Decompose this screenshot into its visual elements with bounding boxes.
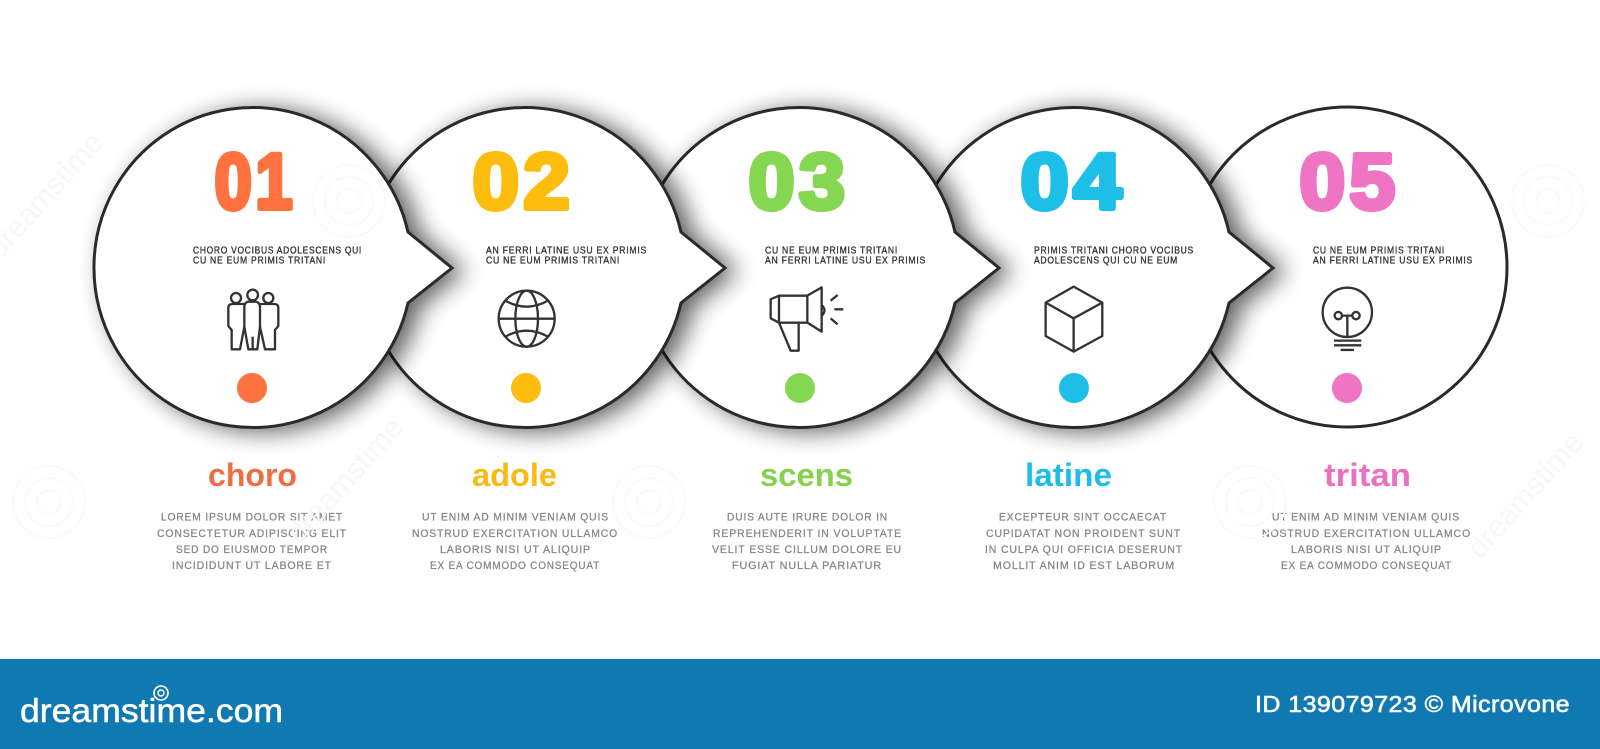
column: latine: [985, 457, 1183, 572]
footer logo: dreamstime.com: [20, 692, 283, 729]
icon: megaphone: [771, 287, 843, 351]
panel: step 05: [1187, 107, 1507, 427]
step 02 text: [486, 244, 647, 266]
number 04: 04: [1020, 137, 1126, 226]
column: latine: EXCEPTEUR SINT OCCAECAT: [999, 512, 1167, 524]
footer bar: [0, 659, 1600, 749]
panel: step 03: [639, 107, 999, 427]
icon: globe: [499, 291, 555, 347]
column: choro: choro: [208, 457, 297, 493]
step 05 text: AN FERRI LATINE USU EX PRIMIS: [1313, 254, 1473, 266]
step 03 text: CU NE EUM PRIMIS TRITANI: [765, 244, 898, 256]
step 01 text: CHORO VOCIBUS ADOLESCENS QUI: [193, 244, 362, 256]
column: adole: NOSTRUD EXERCITATION ULLAMCO: [412, 528, 618, 540]
column: choro: [157, 457, 347, 572]
panel: step 01: [94, 107, 452, 427]
column: adole: [412, 457, 618, 572]
step 01 text: [193, 244, 362, 266]
panel: step 02: [365, 107, 725, 427]
step dot 03: [785, 373, 815, 403]
icon: light bulb: [1323, 288, 1372, 350]
step 04 text: PRIMIS TRITANI CHORO VOCIBUS: [1034, 244, 1194, 256]
column: tritan: tritan: [1324, 457, 1411, 493]
step 02 text: AN FERRI LATINE USU EX PRIMIS: [486, 244, 647, 256]
icon: people: [228, 290, 278, 349]
column: adole: LABORIS NISI UT ALIQUIP: [440, 544, 591, 556]
icon: cube: [1046, 287, 1102, 352]
watermark spirals: [13, 165, 1584, 538]
step 03 text: AN FERRI LATINE USU EX PRIMIS: [765, 254, 926, 266]
column: scens: REPREHENDERIT IN VOLUPTATE: [713, 528, 902, 540]
column: choro: LOREM IPSUM DOLOR SIT AMET: [161, 512, 343, 524]
column: scens: FUGIAT NULLA PARIATUR: [732, 560, 882, 572]
step 03 text: [765, 244, 926, 266]
column: scens: scens: [760, 457, 853, 493]
column: tritan: NOSTRUD EXERCITATION ULLAMCO: [1262, 528, 1471, 540]
step dot 04: [1059, 373, 1089, 403]
column: latine: CUPIDATAT NON PROIDENT SUNT: [986, 528, 1181, 540]
column: choro: CONSECTETUR ADIPISCING ELIT: [157, 528, 347, 540]
panel: step 04: [913, 107, 1273, 427]
column: adole: UT ENIM AD MINIM VENIAM QUIS: [422, 512, 609, 524]
watermark wordmarks: dreamstime: [1461, 426, 1590, 565]
number 05: 05: [1300, 138, 1399, 226]
column: adole: EX EA COMMODO CONSEQUAT: [430, 560, 600, 572]
column: scens: [712, 457, 902, 572]
step 05 text: CU NE EUM PRIMIS TRITANI: [1313, 244, 1445, 256]
column: choro: INCIDIDUNT UT LABORE ET: [172, 560, 332, 572]
footer credit: ID 139079723 © Microvone: [1255, 691, 1570, 717]
column: scens: DUIS AUTE IRURE DOLOR IN: [727, 512, 888, 524]
column: tritan: [1262, 457, 1471, 572]
column: latine: IN CULPA QUI OFFICIA DESERUNT: [985, 544, 1183, 556]
column: adole: adole: [472, 457, 557, 493]
column: tritan: LABORIS NISI UT ALIQUIP: [1291, 544, 1442, 556]
step 04 text: [1034, 244, 1194, 266]
step dot 02: [511, 373, 541, 403]
column: scens: VELIT ESSE CILLUM DOLORE EU: [712, 544, 902, 556]
number 02: 02: [472, 138, 574, 226]
step dot 01: [237, 373, 267, 403]
watermark wordmarks: dreamstime: [281, 411, 410, 550]
column: tritan: EX EA COMMODO CONSEQUAT: [1281, 560, 1452, 572]
watermark wordmarks: [0, 126, 1590, 565]
number 03: 03: [748, 138, 849, 226]
step 01 text: CU NE EUM PRIMIS TRITANI: [193, 254, 326, 266]
step dot 05: [1332, 373, 1362, 403]
number 01: 01: [214, 137, 296, 226]
step 02 text: CU NE EUM PRIMIS TRITANI: [486, 254, 620, 266]
step 04 text: ADOLESCENS QUI CU NE EUM: [1034, 254, 1178, 266]
step 05 text: [1313, 244, 1473, 266]
column: choro: SED DO EIUSMOD TEMPOR: [176, 544, 328, 556]
column: tritan: UT ENIM AD MINIM VENIAM QUIS: [1272, 512, 1460, 524]
column: latine: MOLLIT ANIM ID EST LABORUM: [993, 560, 1175, 572]
column: latine: latine: [1025, 457, 1112, 493]
